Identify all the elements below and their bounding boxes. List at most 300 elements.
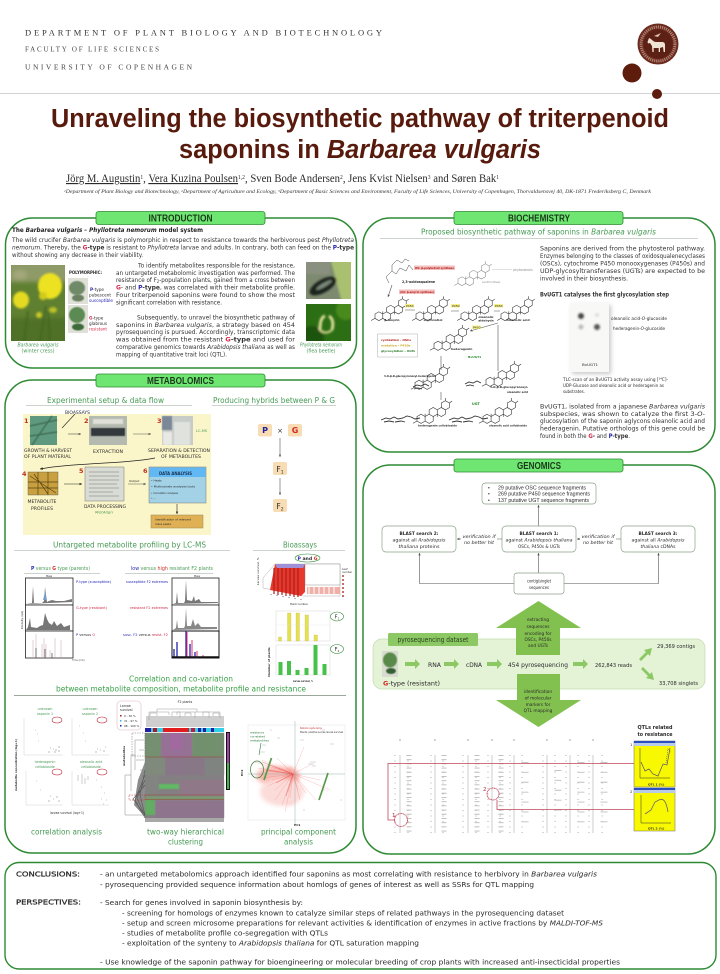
- QTL plot 1: 1: [630, 742, 633, 747]
- oval label F1: 1: [337, 616, 339, 620]
- G-type label: G-type (resistant): [383, 680, 440, 688]
- phytosterol branch: [454, 261, 533, 286]
- bioassays pointer: BIOASSAYS: [65, 410, 90, 415]
- cellobiosides: hederagenin cellobioside: [418, 424, 457, 428]
- arrow down: identification: QTL mapping: [524, 708, 553, 714]
- authors: , Sven Bode Andersen: [245, 173, 340, 185]
- contigs and singlets: 29,369 contigs: [657, 644, 695, 650]
- panel: biochemistry: [363, 212, 715, 452]
- oval label F1: F: [335, 614, 337, 620]
- label: correlation analysis: correlation analysis: [31, 828, 102, 836]
- glucosides: UGT: [472, 402, 480, 406]
- hybrid cross diagram: F: [276, 502, 281, 511]
- row of aglycones: P450: [406, 304, 414, 308]
- arrow up: extracting: sequences: [527, 625, 550, 630]
- chromatograms: F2 extremes: resistant F2 extremes: [130, 606, 168, 610]
- polymorphic types: pubescent: [89, 292, 111, 298]
- sequence fragments box: 29 putative OSC sequence fragments: [498, 486, 587, 492]
- step 3 separation: LC-MS: [196, 429, 208, 433]
- intro paragraph: without showing any decrease in their viability.: [12, 252, 143, 259]
- QTL plot 2: QTL 2 (%): [648, 826, 665, 830]
- chromatograms: F2 extremes: susceptible F2 extremes: [126, 580, 168, 584]
- scatter: hederagenin cellobioside: [26, 760, 63, 805]
- polymorphic types: resistant: [89, 326, 107, 332]
- box: identification: [151, 515, 203, 528]
- chromatograms: parents: Intensity (cps): [20, 611, 24, 629]
- authors: , Jens Kvist Nielsen: [343, 173, 428, 185]
- colour scale: [226, 732, 230, 790]
- PCA biplot: resistance: [250, 730, 264, 734]
- PCA biplot: correlated: [250, 734, 265, 738]
- subheading: correlation: Correlation and co-variation: [129, 674, 233, 684]
- connector to BLAST 1: [538, 553, 540, 573]
- scatter: oleanolic acid cellobioside: cellobioside: [81, 765, 101, 769]
- survival legend: 0 - 30 %: [124, 714, 136, 718]
- conclusions text: - an untargeted metabolomics approach identified four saponins as most correlating with resistance to herbivory in Barbarea vulgaris: [100, 870, 597, 878]
- label: pca: [261, 828, 336, 846]
- label: clustering: two-way hierarchical: [147, 828, 224, 836]
- TLC caption: substrates.: [563, 389, 585, 395]
- survival legend: survival: [120, 708, 133, 712]
- chromatograms: parents: Mass: [46, 575, 53, 578]
- intro column text: 2: [157, 279, 160, 284]
- hybrid cross diagram: G: [292, 426, 298, 435]
- intro subheading: The Barbarea vulgaris – Phyllotreta nemorum model system: [12, 226, 203, 234]
- contig/singlet box: sequences: [529, 586, 549, 591]
- BvUGT1 paragraph: subspecies, was shown to catalyze the first 3- O-: [540, 411, 705, 418]
- authors: 3: [428, 175, 431, 181]
- photo: winter cress: [11, 265, 65, 341]
- step 3 separation: [148, 416, 210, 459]
- arrow up: extracting: extracting: [527, 617, 549, 623]
- arrow up: extracting: OSCs, P450s: [524, 637, 552, 643]
- arrow down: identification: markers for: [526, 702, 551, 708]
- F2 comparison heading: low versus high resistant F2 plants: [131, 566, 213, 572]
- panel: metabolomics: [5, 374, 356, 853]
- header: department lines: DEPARTMENT OF PLANT BIOLOGY AND BIOTECHNOLOGY: [25, 28, 382, 38]
- chromatograms: F2 extremes: [123, 575, 219, 658]
- curved arrow: [40, 458, 155, 469]
- intro column text: Four triterpenoid saponins were found to show the most: [116, 292, 296, 299]
- sequence fragments box: •: [488, 492, 490, 498]
- subheading: pathway: Proposed biosynthetic pathway of saponins in Barbarea vulgaris: [421, 228, 656, 236]
- BvUGT1 paragraph: found in both the G- and P-type.: [540, 433, 630, 440]
- photo: larva on leaf: [306, 304, 351, 341]
- step 1 growth: [24, 416, 72, 459]
- header: department lines: FACULTY OF LIFE SCIENCES: [25, 46, 159, 54]
- PCA biplot: metabolites: [250, 738, 269, 742]
- label: pca: principal component: [261, 828, 336, 836]
- step 6 data analysis: • Correlation analyses: [151, 491, 178, 495]
- BvUGT1 paragraph: [540, 404, 706, 440]
- hederagenin: P450: [473, 326, 481, 330]
- heading: metabolomics: [96, 374, 265, 387]
- flow: RNA to reads: cDNA: [466, 662, 483, 669]
- authors: 1: [496, 175, 499, 181]
- perspectives text: - screening for homologs of enzymes known to catalyze similar steps of related pathways in the pyrosequencing dataset: [122, 908, 564, 918]
- header: department lines: UNIVERSITY OF COPENHAGEN: [25, 62, 193, 72]
- F2 bar chart: Number of plants: [267, 647, 271, 677]
- BLAST search 3: thaliana cDNAs: [640, 544, 676, 550]
- subheading: bioassays: Bioassays: [283, 540, 317, 550]
- scatter: unknown saponin 1: saponin 1: [37, 712, 53, 716]
- biochemistry intro text: (OSCs), cytochrome P450 monooxygenases (P450s) and: [540, 260, 705, 268]
- heading: introduction: INTRODUCTION: [148, 214, 212, 224]
- contigs and singlets: [657, 644, 698, 687]
- panel: genomics: [363, 459, 715, 854]
- heatmap with dendrograms: [122, 700, 230, 822]
- F1 bar chart: [276, 611, 330, 641]
- heading: introduction: [96, 212, 265, 224]
- heading: metabolomics: METABOLOMICS: [147, 376, 214, 387]
- BLAST search 3: BLAST search 3:: [638, 531, 678, 537]
- flow: RNA to reads: 262,843 reads: [595, 663, 632, 669]
- hybrid cross diagram: 1: [281, 470, 284, 476]
- scatter: unknown saponin 1: unknown: [38, 707, 52, 711]
- authors: ,: [143, 173, 148, 185]
- step 6 data analysis: • Multivariate analyses tools: [151, 484, 196, 488]
- caption: winter cress: [18, 342, 59, 354]
- scatter: oleanolic acid cellobioside: oleanolic acid: [80, 760, 102, 764]
- intro column text: pyrosequencing is pursued. Accordingly, transcriptomic data: [116, 329, 295, 336]
- hybrid cross diagram: 2: [281, 506, 284, 512]
- genetic linkage map: [395, 739, 604, 833]
- photo: beetle: [306, 262, 351, 299]
- subheading: correlation: [14, 674, 346, 696]
- BvUGT1 paragraph: BvUGT1, isolated from a japanese Barbarea vulgaris: [540, 404, 706, 410]
- biochemistry intro text: UDP-glycosyltransferases (UGTs) are expected to be: [540, 268, 705, 275]
- heading: biochemistry: [454, 212, 623, 224]
- scatter: unknown saponin 1: [24, 707, 63, 755]
- BLAST search 2: [382, 526, 456, 552]
- subheading: untargeted profiling: Untargeted metabolite profiling by LC-MS: [53, 540, 206, 550]
- polymorphic types: susceptible: [89, 298, 113, 303]
- label: pca: analysis: [284, 838, 313, 846]
- affiliations: 3: [278, 189, 280, 193]
- scatter: unknown saponin 2: saponin 2: [82, 712, 98, 716]
- correlation scatter plots: [14, 707, 109, 815]
- enzyme legend box: cyclization - OSCs: [381, 338, 411, 342]
- BvUGT1 paragraph: glucosylation of the saponin aglycons oleanolic acid and: [540, 418, 705, 425]
- intro column text: -population plants, gained from a cross between: [159, 277, 295, 284]
- arrow down: identification: identification: [524, 689, 552, 695]
- tag: pyrosequencing dataset: pyrosequencing dataset: [398, 636, 469, 644]
- sequence fragments box: 269 putative P450 sequence fragments: [498, 492, 591, 498]
- cellobiosides: [381, 398, 527, 428]
- arrow up: extracting: and UGTs: [528, 643, 549, 649]
- arrow down: identification: [496, 674, 581, 727]
- step 6 data analysis: DATA ANALYSIS: [159, 471, 192, 477]
- enzyme legend box: oxidation - P450s: [381, 344, 411, 348]
- chromatograms: F2 extremes: susc. F2 versus resist. F2: [123, 633, 168, 637]
- 3D bioassay chart: Leaf: [342, 567, 348, 571]
- subheading: hybrids: Producing hybrids between P & G: [213, 396, 335, 405]
- contigs and singlets: 33,708 singlets: [659, 681, 698, 687]
- flow: RNA to reads: 454 pyrosequencing: [508, 662, 568, 669]
- authors: and Søren Bak: [431, 173, 496, 185]
- arrow up: extracting: encoding for: [524, 631, 552, 637]
- flow diagram: [22, 410, 211, 535]
- conclusions text: - pyrosequencing provided sequence information about homlogs of genes of interest as well as SSRs for QTL mapping: [100, 880, 534, 889]
- authors: 1: [140, 175, 143, 181]
- arrow output: Output: [129, 479, 140, 483]
- row of aglycones: aldehyde: [478, 318, 494, 322]
- BLAST search 1: against Arabidopsis thaliana: [506, 538, 573, 544]
- step 4 profiles: METABOLITE: [28, 499, 57, 504]
- scatter: hederagenin cellobioside: hederagenin: [35, 760, 55, 764]
- subheading: bioassays: [253, 540, 345, 550]
- step 2 extraction: 2: [84, 417, 89, 425]
- conclusions text: [100, 870, 597, 889]
- QTL heading: QTLs related: [638, 725, 673, 731]
- step 5 data processing: DATA PROCESSING: [84, 504, 126, 509]
- scatter: unknown saponin 2: unknown: [83, 707, 97, 711]
- flow: RNA to reads: RNA: [428, 662, 442, 669]
- QTL plot 1: QTL 1 (%): [648, 782, 665, 786]
- conclusions label: CONCLUSIONS:: [16, 870, 80, 878]
- perspectives text: [100, 898, 620, 966]
- PCA biplot: Plants: positive scores larvae survival: [300, 730, 343, 734]
- PCA biplot: PC2: [240, 770, 244, 776]
- header: department lines: [25, 28, 382, 72]
- oval label F1: [330, 612, 344, 621]
- scatter: unknown saponin 2: [72, 707, 109, 755]
- oval label F2: F: [335, 647, 337, 653]
- pyrosequencing panel: [373, 633, 705, 689]
- bioassays pointer: [62, 410, 90, 428]
- intro column text: significant correlation with resistance.: [116, 300, 222, 306]
- 3D bioassay chart: Larvae survival, %: [256, 557, 260, 585]
- caption: flea beetle: Phyllotreta nemorum: [300, 342, 342, 348]
- squalene: 2,3-oxidosqualene: [402, 280, 435, 284]
- glucosides: [384, 361, 529, 406]
- enzyme legend box: glycosylation - UGTs: [381, 349, 415, 353]
- oval label P and G: P and G: [298, 556, 318, 562]
- step 3 separation: 3: [157, 417, 162, 425]
- caption: flea beetle: (flea beetle): [306, 348, 336, 354]
- chromatograms: parents: G-type (resistant): [76, 606, 108, 610]
- label: clustering: clustering: [168, 838, 203, 846]
- intro column text: To identify metabolites responsible for the resistance,: [137, 262, 295, 270]
- heading: genomics: GENOMICS: [517, 461, 561, 472]
- caption: flea beetle: [300, 342, 342, 354]
- row of aglycones: P450: [452, 304, 460, 308]
- TLC caption: [562, 377, 668, 395]
- polymorphic types: G-type: [89, 316, 104, 320]
- QTL plot 2: [630, 788, 675, 831]
- caption: winter cress: Barbarea vulgaris: [18, 342, 59, 348]
- 3D bioassay chart: Plant number: [290, 602, 309, 606]
- affiliations: Department of Basic Sciences and Environment, Faculty of Life Sciences, University of Copenhagen, Thorvaldsensvej 40, DK-1871 Frederiksberg C, Denmark: [279, 188, 652, 195]
- authors: Jörg M. Augustin: [66, 173, 141, 185]
- cellobiosides: oleanolic acid cellobioside: [489, 424, 527, 428]
- step 6 data analysis: [143, 467, 206, 503]
- TLC plate: BvUGT1: [582, 362, 599, 367]
- step 6 data analysis: • ...: [151, 496, 156, 500]
- decorative dot small: [652, 89, 662, 99]
- affiliations: Department of Plant Biology and Biotechnology,: [65, 188, 181, 195]
- hederagenin: [430, 323, 498, 359]
- connector to BLAST 3: [564, 553, 658, 584]
- polymorphic types: P-type: [90, 287, 104, 292]
- BLAST search 1: OSCs, P450s & UGTs: [518, 544, 561, 550]
- QTL markers and red connectors: 2: [483, 787, 486, 793]
- QTL markers and red connectors: 1: [392, 813, 396, 819]
- survival legend: 98 - 100 %: [124, 724, 140, 728]
- intro column text: resistance of F: [116, 277, 161, 284]
- glucosides: 3-O-β-D-glucopyranosyl-: [490, 385, 529, 389]
- panel: introduction: [6, 212, 356, 368]
- intro column text: an untargeted metabolomic investigation was performed. The: [116, 270, 295, 277]
- oval label F2: [330, 644, 344, 654]
- hederagenin: hederagenin: [451, 347, 472, 351]
- TLC caption: TLC-scan of an BvUGT1 activity assay using [¹⁴C]-: [562, 377, 668, 383]
- step 5 data processing: MetAlign: [95, 510, 114, 514]
- QTL plot 2: 2: [630, 789, 633, 794]
- authors: 1,2: [238, 175, 245, 181]
- pathway vertical arrows: [441, 325, 498, 400]
- step 2 extraction: [84, 416, 127, 454]
- verification right: [577, 532, 621, 546]
- row of aglycones: β-amyrin: [384, 318, 400, 322]
- chromatograms: parents: Time (min): [72, 659, 85, 662]
- perspectives text: - setup and screen microsome preparations for relevant activities & identification of enzymes in active fractions by MALDI-TOF-MS: [122, 918, 603, 928]
- intro column text: comparative genomics towards Arabidopsis thaliana as well as: [116, 343, 295, 351]
- intro paragraph: [11, 236, 354, 259]
- step 2 extraction: EXTRACTION: [93, 449, 123, 454]
- 3D bioassay chart: number: [342, 570, 353, 574]
- step 1 growth: OF PLANT MATERIAL: [24, 454, 72, 459]
- correlation scatter plots: metabolite concentration (log+1): [14, 738, 18, 791]
- arrow: [64, 483, 82, 485]
- step 3 separation: SEPARATION & DETECTION: [148, 448, 210, 453]
- step 1 growth: 1: [24, 417, 29, 425]
- title: Unraveling the biosynthetic pathway of triterpenoid: [51, 105, 669, 133]
- sequence fragments box: 137 putative UGT sequence fragments: [498, 498, 590, 504]
- hybrid cross diagram: P: [262, 426, 268, 435]
- pathway diagram: [371, 259, 535, 428]
- row of aglycones: [371, 296, 535, 322]
- heading: biochemistry: BIOCHEMISTRY: [508, 214, 570, 224]
- step 5 data processing: 5: [79, 467, 84, 475]
- perspectives text: - studies of metabolite profile co-segregation with QTLs: [122, 928, 328, 938]
- arrow: [133, 433, 151, 435]
- TLC caption: UDP-Glucose and oleanolic acid or hederagenin as: [563, 383, 665, 389]
- affiliations: 2: [181, 189, 183, 193]
- TLC plate: hederagenin-O-glucoside: [613, 326, 666, 331]
- AA enzyme label: (AA: β-amyrin synthase): [400, 290, 435, 294]
- PCA biplot: PC1: [294, 823, 300, 827]
- perspectives text: - Use knowledge of the saponin pathway for bioengineering or molecular breeding of crop plants with increased anti-insecticidal properties: [100, 958, 620, 966]
- row of aglycones: P450: [495, 304, 503, 308]
- chromatograms: parents: P versus G: [76, 633, 95, 637]
- arrow down: identification: of molecular: [525, 696, 552, 702]
- scatter: hederagenin cellobioside: cellobioside: [35, 765, 55, 769]
- intro column text: saponins in Barbarea vulgaris , a strategy based on 454: [116, 322, 295, 329]
- authors: 2: [340, 175, 343, 181]
- intro column text: was obtained from the resistant G-type and used for: [116, 336, 295, 344]
- perspectives label: PERSPECTIVES:: [16, 898, 81, 906]
- glucosides: oleanolic acid: [507, 390, 528, 394]
- perspectives text: - exploitation of the synteny to Arabidopsis thaliana for QTL saturation mapping: [122, 938, 419, 948]
- intro column text: [116, 262, 296, 358]
- PCA biplot: Metabolites: negative loadings: [300, 726, 322, 730]
- correlation scatter plots: larvae survival (log+1): [50, 811, 84, 815]
- heatmap with dendrograms: F2 plants: [178, 700, 193, 704]
- affiliations: 1: [64, 189, 66, 193]
- sequence fragments box: •: [488, 486, 490, 492]
- arrow: [388, 285, 392, 297]
- arrow up to fragments: [538, 505, 540, 526]
- BvUGT1 paragraph: hederagenin. Putative orthologs of this gene could be: [540, 426, 705, 432]
- decorative dot large: [622, 64, 642, 82]
- survival legend: Larvae: [120, 704, 131, 708]
- OSC enzyme label: OS: β-polyketoid synthase: [415, 266, 454, 270]
- heading: genomics: [454, 459, 623, 472]
- label: clustering: [147, 828, 224, 846]
- sample colour bar: [145, 728, 224, 732]
- QTL heading: [638, 725, 673, 738]
- arrow output: [128, 479, 146, 484]
- verification left: verification if: [462, 534, 497, 540]
- oval label F2: 2: [337, 649, 339, 653]
- left dendrogram: metabolites: [122, 746, 126, 766]
- box: identification: mass peaks: [155, 522, 171, 526]
- subheading: experimental setup: Experimental setup & data flow: [47, 396, 164, 405]
- affiliations: Department of Agriculture and Ecology,: [182, 188, 278, 195]
- F2 bar chart: [267, 645, 330, 683]
- panel: conclusions and perspectives: [5, 862, 716, 969]
- authors: Vera Kuzina Poulsen: [148, 173, 238, 185]
- BLAST search 3: against all Arabidopsis: [632, 538, 685, 544]
- arrow: [176, 504, 178, 514]
- row of aglycones: erythrodiol: [424, 318, 442, 322]
- polymorphic types: [68, 270, 113, 333]
- flow: RNA to reads: [405, 659, 632, 669]
- step 6 data analysis: • Heats: [151, 478, 162, 482]
- contig/singlet box: [514, 573, 564, 594]
- BLAST search 2: thaliana proteins: [398, 544, 440, 550]
- QTL plot 1: [630, 741, 675, 787]
- chromatograms: parents: [20, 575, 112, 662]
- polymorphic types: POLYMORPHIC:: [69, 270, 102, 276]
- hybrid cross diagram: ×: [277, 427, 283, 435]
- TLC plate: oleanolic acid- O-glucoside: [611, 316, 668, 321]
- arrow up: extracting: [496, 601, 581, 655]
- intro paragraph: nemorum. Thereby, the G-type is resistant to Phyllotreta larvae and adults. In contrary, both can feed on the P-type: [12, 244, 354, 252]
- verification left: no better hit: [464, 540, 494, 546]
- step 5 data processing: [79, 467, 126, 514]
- F2 bar chart: Larvae survival, %: [293, 679, 313, 683]
- BLAST search 2: against all Arabidopsis: [392, 538, 446, 544]
- row of aglycones: oleanolic acid: [506, 318, 530, 322]
- G-type seedling: [382, 651, 398, 677]
- verification right: verification if: [582, 534, 616, 540]
- BLAST search 1: BLAST search 1:: [520, 531, 559, 537]
- step 6 data analysis: 6: [143, 467, 148, 475]
- step 1 growth: GROWTH & HARVEST: [24, 448, 72, 453]
- QTL markers and red connectors: [388, 764, 634, 826]
- survival legend: [117, 701, 141, 730]
- 3D bioassay chart: [256, 557, 353, 606]
- contig/singlet box: contig/singlet: [527, 578, 551, 584]
- top dendrogram: [146, 709, 224, 727]
- title: saponins in Barbarea vulgaris: [179, 136, 541, 164]
- icon: university seal: [638, 24, 678, 64]
- branch arrows: [639, 648, 654, 680]
- sequence fragments box: [482, 483, 596, 504]
- tag: pyrosequencing dataset: [388, 633, 478, 646]
